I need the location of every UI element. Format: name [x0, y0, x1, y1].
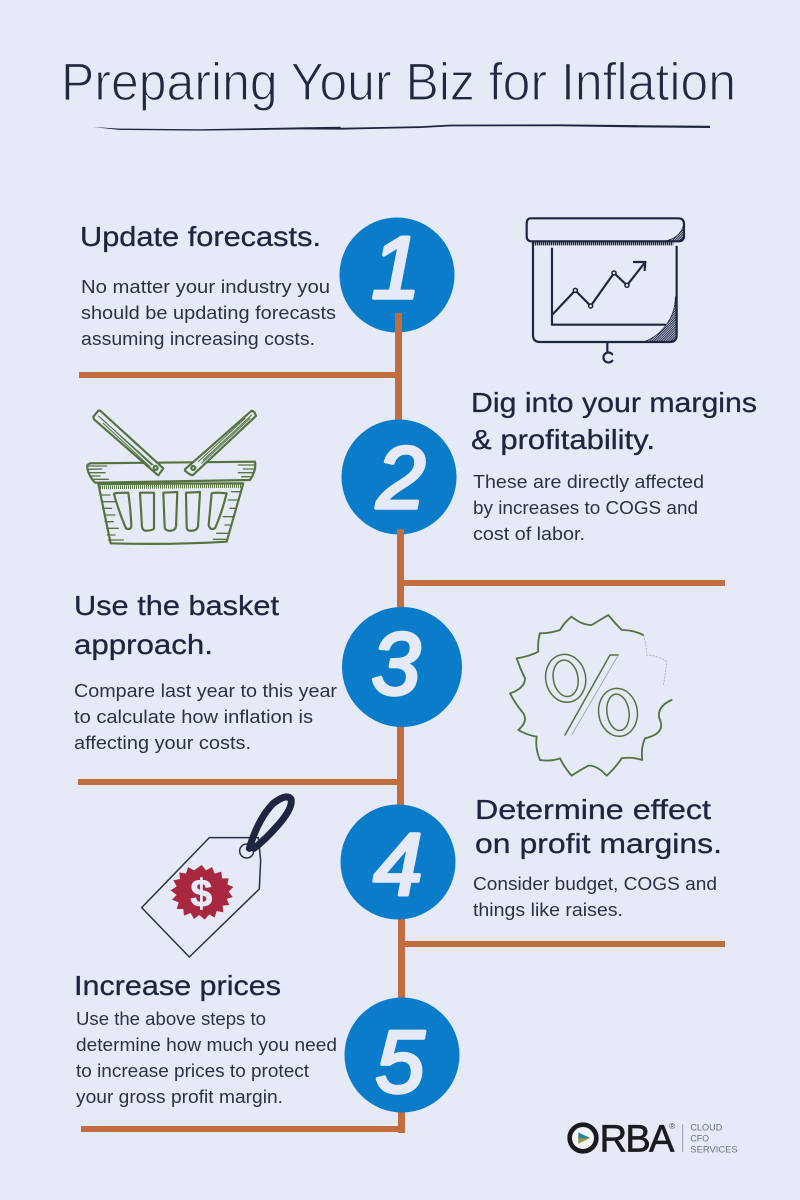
logo mark: ring with play arrow [570, 1125, 596, 1151]
step 2 text: These are directly affected [473, 471, 704, 492]
step 4 text: Determine effect [475, 794, 711, 825]
step 3 text: approach. [74, 629, 213, 660]
step 5 text: determine how much you need [76, 1034, 337, 1055]
logo: ORBA Cloud CFO Services: CLOUD [690, 1122, 723, 1132]
logo: ORBA Cloud CFO Services: CFO [690, 1134, 709, 1144]
step 2 text: cost of labor. [473, 523, 585, 544]
step 5 text: Use the above steps to [76, 1008, 266, 1029]
step 5 badge: 5 [376, 1012, 426, 1111]
step 2 text: Dig into your margins [471, 387, 757, 418]
icon: price tag [142, 797, 291, 957]
step 2 badge [342, 420, 456, 535]
step 3 text: affecting your costs. [74, 732, 251, 753]
step 4 text: on profit margins. [475, 828, 722, 859]
icon: presentation screen with rising chart [527, 218, 684, 362]
step 3 text: to calculate how inflation is [74, 706, 313, 727]
icon: percent badge [510, 615, 672, 776]
step 2 text [471, 387, 757, 544]
step 3 badge [342, 607, 462, 727]
step 4 badge [340, 804, 456, 920]
step 2 text: & profitability. [471, 424, 655, 455]
step 5 badge [344, 998, 460, 1112]
step 4 text: Consider budget, COGS and [473, 873, 717, 894]
brush underline [93, 124, 710, 131]
logo: ORBA Cloud CFO Services: RBA [600, 1118, 675, 1160]
timeline connector [78, 313, 725, 1133]
step 2 badge: 2 [376, 428, 425, 527]
step 5 text: Increase prices [74, 970, 281, 1001]
step 4 text: things like raises. [473, 899, 623, 920]
step 1 badge: 1 [372, 218, 420, 317]
logo: ORBA Cloud CFO Services: SERVICES [690, 1145, 738, 1155]
step 1 text: should be updating forecasts [81, 302, 336, 323]
step 3 text [74, 590, 337, 753]
step 3 text: Use the basket [74, 590, 279, 621]
step 2 text: by increases to COGS and [473, 497, 698, 518]
step 5 text: to increase prices to protect [76, 1060, 309, 1081]
step 3 badge: 3 [372, 614, 421, 713]
step 4 badge: 4 [374, 815, 422, 914]
logo: ORBA Cloud CFO Services [570, 1118, 738, 1160]
icon: price tag: $ [190, 872, 212, 916]
step 1 text: No matter your industry you [81, 276, 330, 297]
step 1 text: Update forecasts. [80, 221, 321, 252]
step 1 text: assuming increasing costs. [81, 328, 315, 349]
step 5 text [74, 970, 337, 1107]
step 5 text: your gross profit margin. [76, 1086, 283, 1107]
logo: ORBA Cloud CFO Services: ® [669, 1121, 676, 1131]
step 1 badge [340, 218, 454, 333]
icon: shopping basket [87, 410, 256, 544]
title: Preparing Your Biz for Inflation [61, 53, 736, 112]
step 1 text [80, 221, 336, 349]
step 3 text: Compare last year to this year [74, 680, 337, 701]
step 4 text [473, 794, 722, 920]
